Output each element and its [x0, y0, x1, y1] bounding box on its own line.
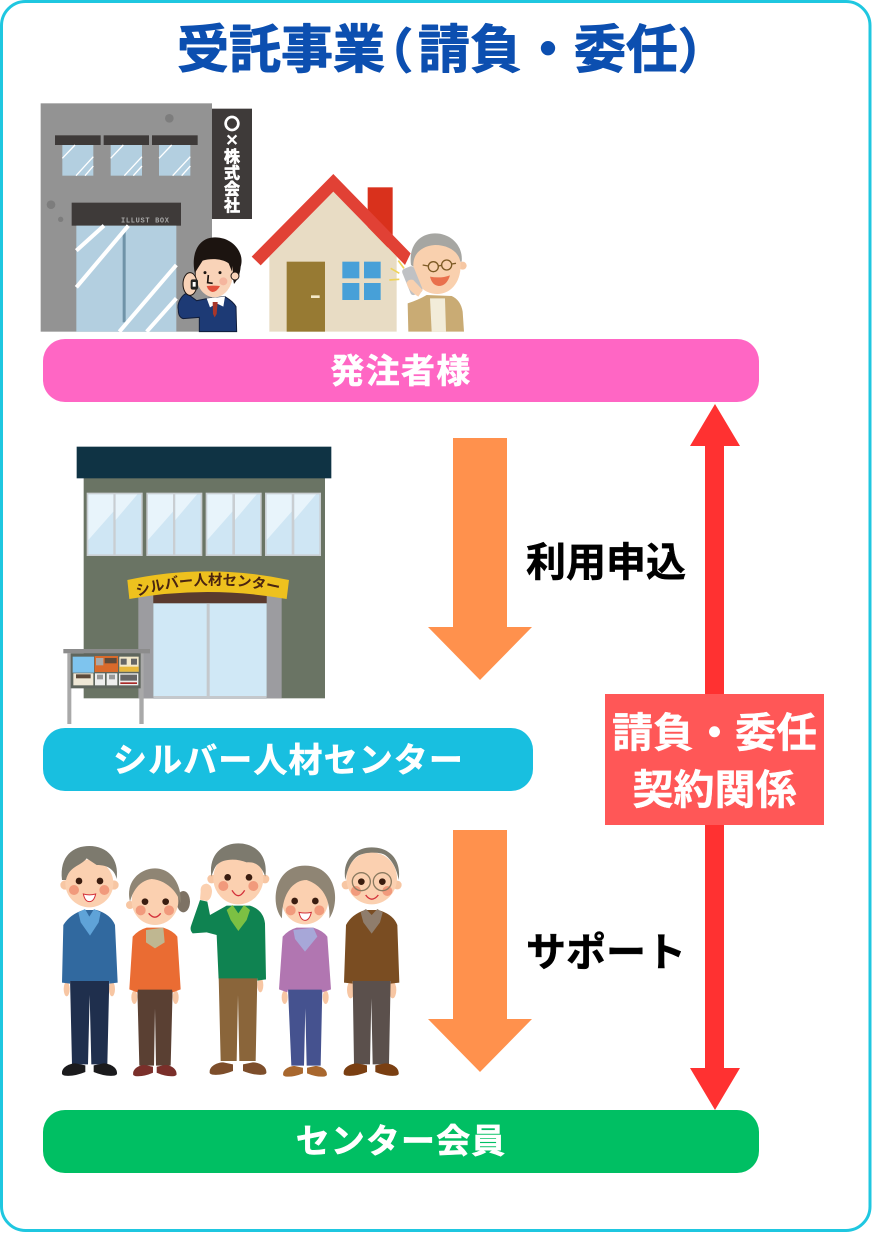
panel: silver center bar	[43, 728, 533, 791]
panel: contract relationship	[605, 694, 824, 825]
title: （	[365, 26, 413, 79]
arrow: application	[428, 438, 532, 680]
title: 請負・委任	[418, 22, 678, 80]
person 1	[60, 846, 119, 1076]
label: client: 発注者様	[330, 353, 472, 391]
label: silver center: シルバー人材センター	[113, 742, 464, 780]
person 4	[276, 866, 335, 1077]
label: center members: センター会員	[296, 1123, 506, 1161]
label: contract line 2: 契約関係	[632, 767, 796, 813]
icon: office building with sign	[41, 103, 252, 332]
icon: office building with sign: 〇	[224, 115, 240, 133]
panel: client bar	[43, 339, 759, 402]
person 3	[191, 843, 269, 1075]
panel: center members bar	[43, 1110, 759, 1173]
icon: notice board	[63, 649, 150, 724]
person 2	[126, 868, 190, 1076]
icon: office building with sign: 株	[224, 148, 240, 166]
icon: silver center building: シルバー人材センター	[136, 572, 280, 596]
person 5	[342, 847, 402, 1076]
title: ）	[678, 26, 726, 79]
label: application: 利用申込	[526, 541, 686, 585]
icon: silver center building	[76, 446, 332, 699]
icon: office building with sign: 会	[224, 180, 240, 198]
icon: elderly man on phone	[389, 233, 467, 332]
label: contract line 1: 請負・委任	[612, 710, 817, 756]
icon: group of seniors	[60, 843, 402, 1077]
icon: house	[252, 174, 411, 332]
label: support: サポート	[526, 931, 686, 975]
arrow: support	[428, 830, 532, 1072]
icon: businessman on phone	[178, 237, 242, 332]
icon: office building with sign: 社	[224, 197, 240, 215]
icon: office building with sign: ILLUST BOX	[121, 218, 170, 226]
arrow: double-headed contract relationship	[690, 404, 740, 1110]
icon: office building with sign: ×	[226, 129, 238, 152]
icon: office building with sign: 式	[224, 165, 240, 183]
title: 受託事業	[177, 22, 385, 80]
